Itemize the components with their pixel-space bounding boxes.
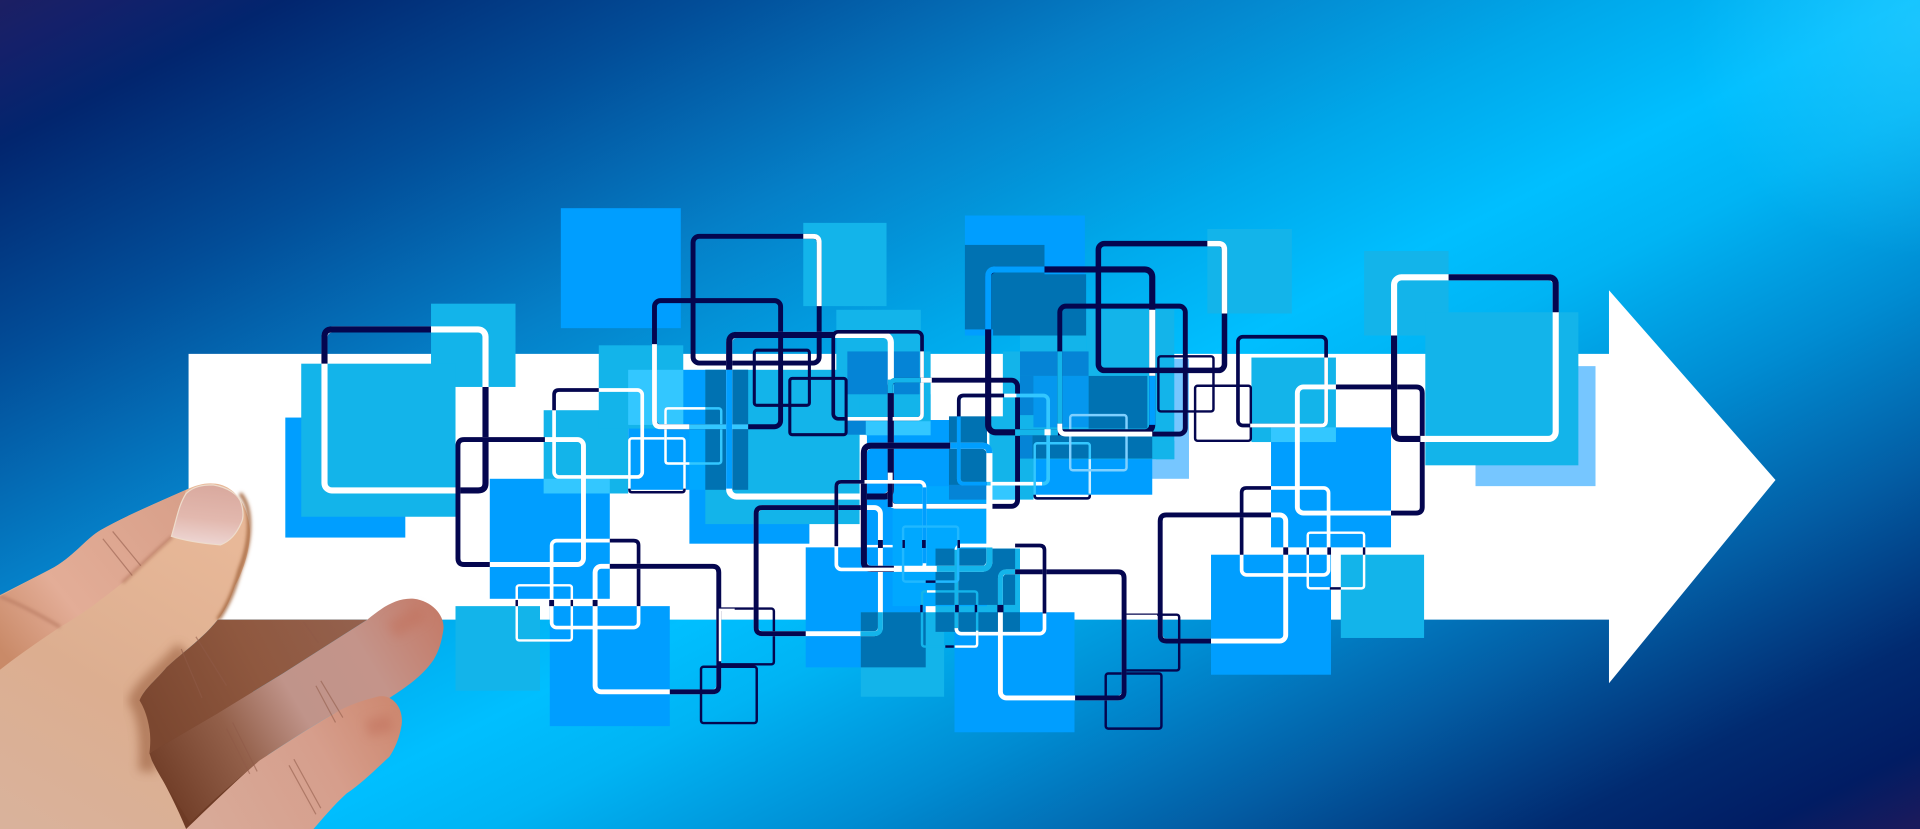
hand: palm and thumb	[0, 483, 250, 829]
rounded outline 12	[864, 446, 989, 569]
gap ticks right	[1283, 547, 1365, 555]
small outline right centre 1	[1035, 443, 1090, 498]
rounded outline 2	[458, 440, 583, 565]
hand: thumbnail	[171, 485, 243, 545]
rounded outline 9	[729, 335, 891, 497]
small outline far right	[1308, 533, 1364, 588]
small outline left 2	[629, 438, 684, 492]
small outline left 1	[517, 585, 572, 640]
white arrow	[189, 290, 1776, 683]
small outline right 1	[1158, 356, 1213, 411]
hand	[0, 483, 444, 829]
hand: thumb rim shadow	[218, 493, 249, 620]
rounded outline 14	[959, 396, 1048, 484]
rounded outline 17	[1060, 306, 1185, 434]
gap ticks centre	[902, 540, 1003, 612]
hand: index finger	[0, 490, 186, 670]
light blue squares	[1069, 359, 1596, 486]
rounded outline 21	[1242, 488, 1329, 575]
rounded outline 23	[1000, 572, 1124, 698]
bright blue squares	[285, 208, 1391, 726]
rounded outline 4	[552, 541, 639, 628]
hand: palm shadow	[137, 649, 184, 771]
hand: middle finger	[149, 599, 444, 823]
rounded outline 3	[554, 390, 642, 477]
rounded outline 19	[1297, 387, 1422, 513]
background glow top right	[1678, 0, 1920, 257]
small outline left 3	[666, 408, 721, 463]
rounded outline 16	[1098, 244, 1224, 370]
small outline right 2	[1195, 386, 1251, 441]
small outline lower right 1	[1124, 615, 1179, 670]
rounded outline 24	[956, 546, 1044, 634]
small outline right centre 2	[1070, 415, 1127, 470]
rounded outline 5	[595, 566, 719, 692]
rounded outline 10	[833, 332, 922, 419]
rounded outline 18	[1238, 337, 1326, 426]
lighter overlap patches	[544, 370, 1336, 500]
small outline lower centre 1	[922, 591, 977, 647]
small outline lower centre 2	[903, 527, 958, 582]
lighter blue edge patch	[689, 425, 705, 490]
hand: back finger in shadow	[140, 620, 367, 753]
gap ticks left	[516, 600, 598, 606]
small outline bottom 1	[719, 609, 774, 664]
hand: knuckle creases	[103, 531, 343, 814]
small outline centre 1	[754, 350, 809, 405]
central lighter blue square	[893, 486, 987, 606]
hand: fingertip redness	[367, 612, 422, 729]
bright blue square over lower right	[954, 612, 1074, 732]
hand: dark gap base	[137, 667, 294, 829]
hand: ring finger	[186, 696, 402, 829]
small outline centre 2	[790, 378, 846, 435]
small outline lower right 2	[1106, 673, 1161, 729]
cyan squares	[301, 223, 1578, 697]
rounded outline 7	[693, 236, 819, 363]
mid bright overlap square	[1033, 376, 1089, 427]
rounded outline 13	[836, 482, 924, 569]
rounded outline 8	[654, 301, 781, 427]
rounded outline 20	[1394, 277, 1556, 439]
rounded outline 1	[324, 329, 486, 490]
dark overlap squares	[705, 245, 1152, 667]
cyan square behind lower centre	[936, 549, 1020, 632]
small outline bottom 2	[701, 667, 757, 723]
rounded outline 11	[890, 380, 1018, 507]
hand: crease between index and thumb	[0, 536, 173, 627]
mid blue overlap squares	[846, 351, 1089, 500]
rounded outline 6	[756, 508, 880, 634]
rounded outline 22	[1160, 515, 1286, 641]
rounded outline 15	[988, 269, 1152, 432]
